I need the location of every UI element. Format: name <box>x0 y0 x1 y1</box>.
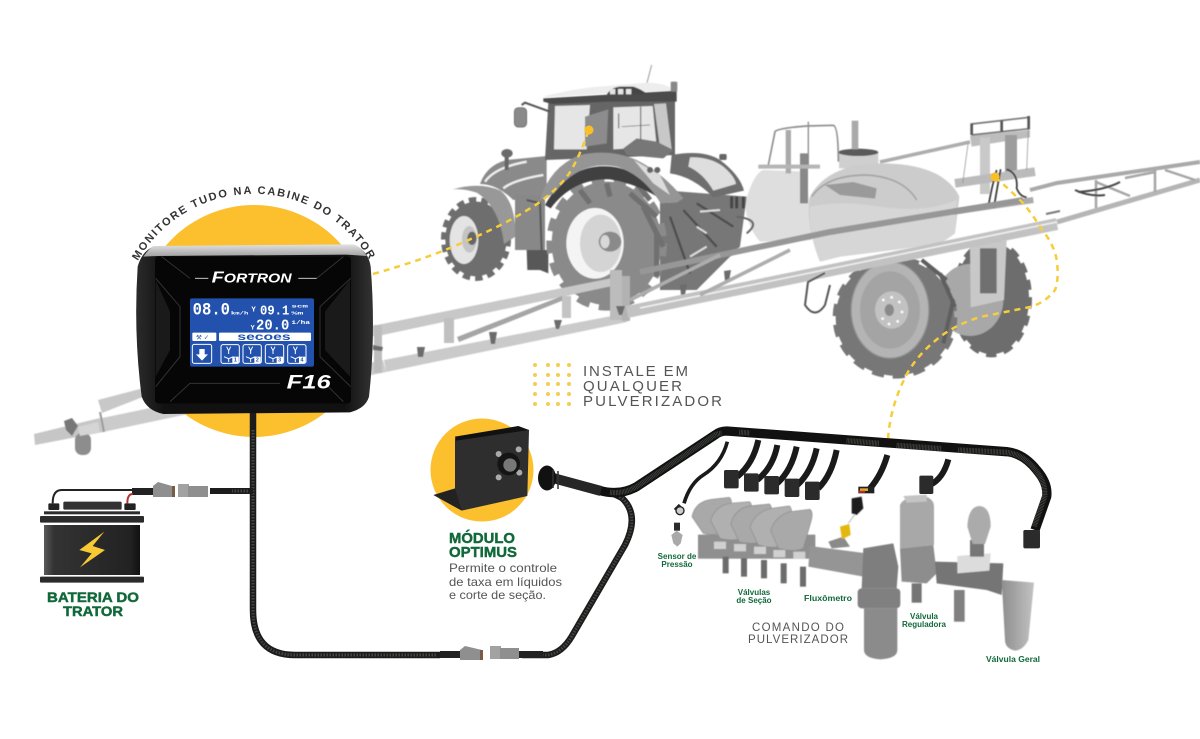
main harness <box>600 431 1047 530</box>
sensor lead <box>675 505 680 510</box>
install heading: INSTALE EM <box>583 363 688 380</box>
module heading: OPTIMUS <box>449 544 517 561</box>
label: regulator valve <box>902 612 947 629</box>
module description: e corte de seção. <box>449 588 546 602</box>
sensor branch <box>684 442 727 503</box>
label: pressure sensor: Sensor de <box>658 552 697 561</box>
LCD screen: 4 <box>301 358 304 364</box>
dashed line: sprayer to harness <box>888 177 1058 440</box>
label: section valves: Válvulas <box>738 588 771 597</box>
battery body <box>44 525 140 575</box>
rear wheel <box>551 181 663 306</box>
command heading: PULVERIZADOR <box>748 634 848 646</box>
LCD screen: 1/ha <box>291 319 311 326</box>
cable: battery branch <box>210 488 253 494</box>
LCD screen: 09.1 <box>260 304 289 320</box>
label: pressure sensor: Pressão <box>661 560 693 569</box>
rear body panel <box>670 153 744 197</box>
LCD screen: 20.0 <box>256 318 289 334</box>
module plug <box>538 466 601 491</box>
cable: monitor to module <box>253 412 632 655</box>
lift tower <box>953 116 1035 307</box>
monitor body <box>136 245 373 414</box>
boom nozzles <box>373 270 731 357</box>
label: regulator valve: Reguladora <box>902 620 947 629</box>
main tank <box>809 163 959 262</box>
hood <box>480 149 547 200</box>
valve branches <box>737 440 948 488</box>
module heading <box>449 529 517 561</box>
yellow circle behind monitor <box>138 205 370 437</box>
module box <box>455 427 529 511</box>
battery top <box>40 502 144 523</box>
command heading: COMANDO DO <box>752 622 844 634</box>
right boom rails <box>627 142 1200 312</box>
module connector <box>496 446 522 480</box>
hitch mechanics <box>660 190 753 290</box>
rear sprayer wheel <box>937 242 1029 354</box>
rear fender <box>540 153 683 208</box>
install heading <box>583 363 722 410</box>
left mirror <box>514 103 550 127</box>
connector pair battery <box>132 482 208 497</box>
top highlight <box>143 244 367 257</box>
location dot: sprayer <box>990 172 1000 182</box>
flow meter body <box>808 497 867 577</box>
label: regulator valve: Válvula <box>910 612 939 621</box>
tractor <box>444 65 753 306</box>
label: section valves <box>736 588 772 605</box>
Optimus module <box>433 426 529 511</box>
harness <box>600 431 1047 548</box>
module heading: MÓDULO <box>449 529 515 547</box>
LCD screen: ⚒ ✓ <box>196 333 209 341</box>
left boom rails <box>98 325 386 432</box>
LCD screen: Y <box>251 306 256 314</box>
rear tank <box>745 170 812 242</box>
main valve <box>935 506 1034 651</box>
boom <box>34 142 1200 455</box>
LCD screen: 08.0 <box>193 301 230 321</box>
module description <box>449 561 562 602</box>
battery wires <box>53 490 133 503</box>
module description: de taxa em líquidos <box>449 575 562 589</box>
yellow circle behind module <box>430 418 534 522</box>
harness wiring <box>600 431 1047 530</box>
label: flow meter: Fluxômetro <box>804 594 852 603</box>
LCD screen: 3 <box>278 358 281 364</box>
section valves <box>692 497 815 587</box>
connector pair bottom <box>440 646 543 660</box>
LCD screen: 2 <box>256 358 259 364</box>
harness connectors <box>724 470 1040 548</box>
battery base <box>40 577 144 583</box>
left boom tip <box>34 418 103 455</box>
sprayer rig <box>745 116 1035 376</box>
monitor F16 <box>136 244 373 414</box>
location dot: tractor cab <box>584 126 594 134</box>
command heading <box>748 622 848 646</box>
front face <box>155 257 351 403</box>
tank filler <box>838 149 878 168</box>
install heading: QUALQUER <box>583 378 682 395</box>
LCD screen: %m <box>291 311 303 317</box>
LCD screen: Y <box>251 323 255 331</box>
filter <box>858 543 900 659</box>
cab <box>543 82 677 160</box>
module top edge <box>455 426 529 441</box>
regulator valve <box>900 495 937 603</box>
middle boom <box>374 270 630 373</box>
label: section valves: de Seção <box>736 596 772 605</box>
LCD screen: secoes <box>237 332 291 343</box>
front wheel <box>444 200 508 278</box>
LCD screen <box>190 298 314 367</box>
install heading dots <box>533 363 571 406</box>
front sprayer wheel <box>836 259 955 376</box>
LCD screen: km/h <box>231 311 248 317</box>
dashed line: monitor to tractor cab <box>373 132 588 274</box>
face panels <box>156 257 351 402</box>
control command valves <box>692 495 1034 659</box>
mounting foot <box>433 488 473 511</box>
flow meter plug <box>858 487 874 493</box>
chassis <box>515 195 548 273</box>
antenna <box>647 65 652 84</box>
label: main valve: Válvula Geral <box>986 655 1040 664</box>
battery label <box>47 589 139 619</box>
battery label: BATERIA DO <box>47 589 139 605</box>
logo: FORTRON <box>212 270 293 287</box>
roll cage <box>758 121 855 203</box>
pressure sensor <box>671 507 684 547</box>
lightning bolt <box>79 532 105 567</box>
battery label: TRATOR <box>63 603 123 619</box>
module description: Permite o controle <box>449 561 557 575</box>
label: pressure sensor <box>658 552 697 569</box>
mesh sleeves <box>610 432 1045 527</box>
LCD screen: scm <box>291 304 308 309</box>
curved heading: MONITORE TUDO NA CABINE DO TRATOR <box>132 186 374 260</box>
LCD screen: 1 <box>234 358 237 364</box>
install heading: PULVERIZADOR <box>583 393 722 410</box>
battery <box>40 490 144 583</box>
front fender <box>453 186 515 244</box>
model name: F16 <box>287 372 331 393</box>
